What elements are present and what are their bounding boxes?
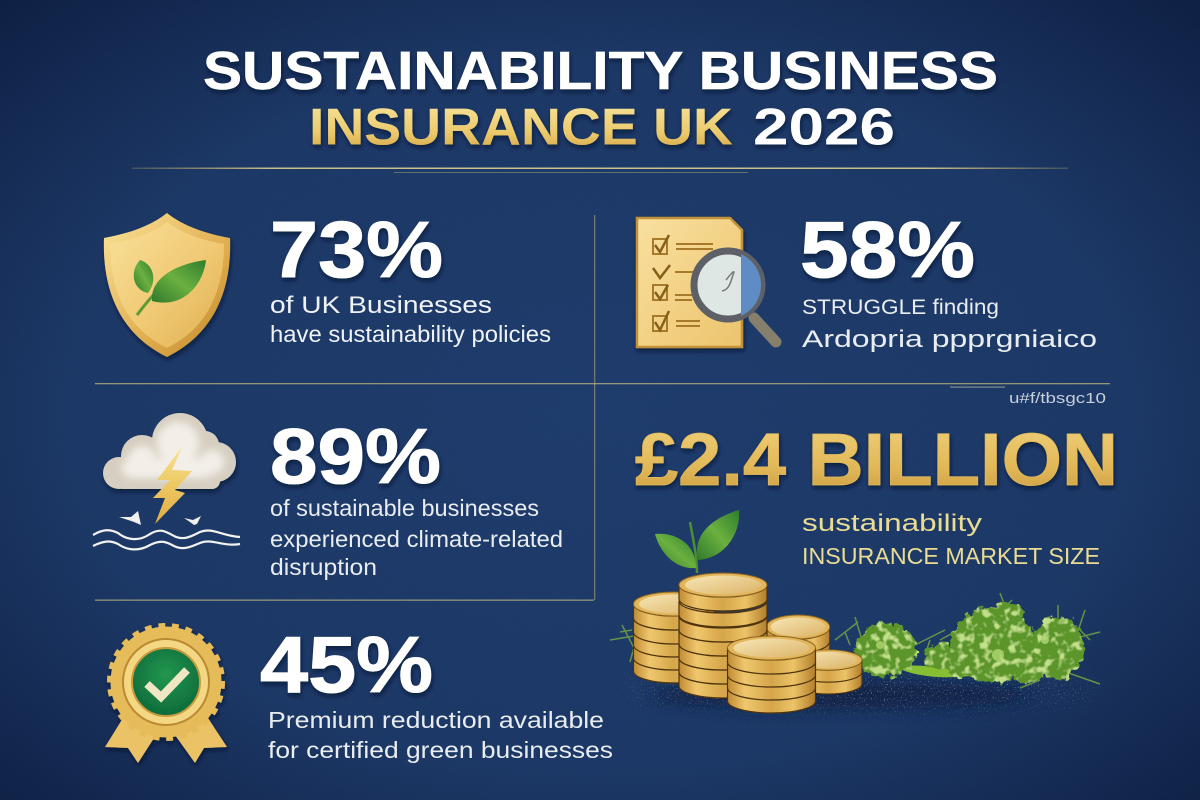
stat: 73%: 73% [270, 205, 443, 294]
panel: 89% climate disruption [93, 412, 563, 580]
description: UK businesses: have sustainability policies [270, 321, 551, 347]
icon: storm cloud [93, 413, 240, 549]
icon: shield with leaf [104, 213, 230, 357]
icon: award badge [105, 626, 227, 763]
description: premium reduction [268, 707, 613, 763]
illustration: green foliage [610, 593, 1100, 688]
icon: checklist with magnifier [637, 218, 776, 347]
title [203, 41, 998, 156]
description: premium reduction: for certified green businesses [268, 737, 613, 763]
stat: 45%: 45% [260, 620, 433, 709]
description: UK businesses [270, 292, 551, 347]
small label: u#f/tbsgc10 [1009, 390, 1106, 407]
description: market size: INSURANCE MARKET SIZE [802, 543, 1100, 569]
description: climate-related disruption: experienced climate-related [270, 526, 563, 552]
illustration: sprout [655, 510, 739, 573]
description: market size [802, 510, 1100, 569]
illustration: ground speckle [620, 674, 1100, 709]
description: climate-related disruption: disruption [270, 554, 377, 580]
description: climate-related disruption: of sustainable businesses [270, 495, 539, 521]
title: 2026 [753, 98, 895, 156]
panel: 73% policies [104, 205, 551, 357]
description: climate-related disruption [270, 495, 563, 580]
description: market size: sustainability [802, 510, 982, 537]
description: struggle finding: STRUGGLE finding [802, 296, 999, 319]
title: SUSTAINABILITY BUSINESS [203, 41, 998, 101]
panel: market size [610, 418, 1118, 713]
stat: 58%: 58% [800, 205, 975, 294]
stat: 2.4 billion: £2.4 BILLION [635, 418, 1118, 501]
title: INSURANCE UK [309, 98, 733, 156]
panel: 45% premium reduction [105, 620, 613, 763]
description: struggle finding [802, 296, 1097, 353]
description: UK businesses: of UK Businesses [270, 292, 492, 319]
description: struggle finding: Ardopria ppprgniaico [802, 326, 1097, 353]
panel: 58% struggle [637, 205, 1106, 407]
description: premium reduction: Premium reduction available [268, 707, 604, 733]
stat: 89%: 89% [270, 412, 441, 500]
illustration: coin stacks [634, 573, 862, 713]
